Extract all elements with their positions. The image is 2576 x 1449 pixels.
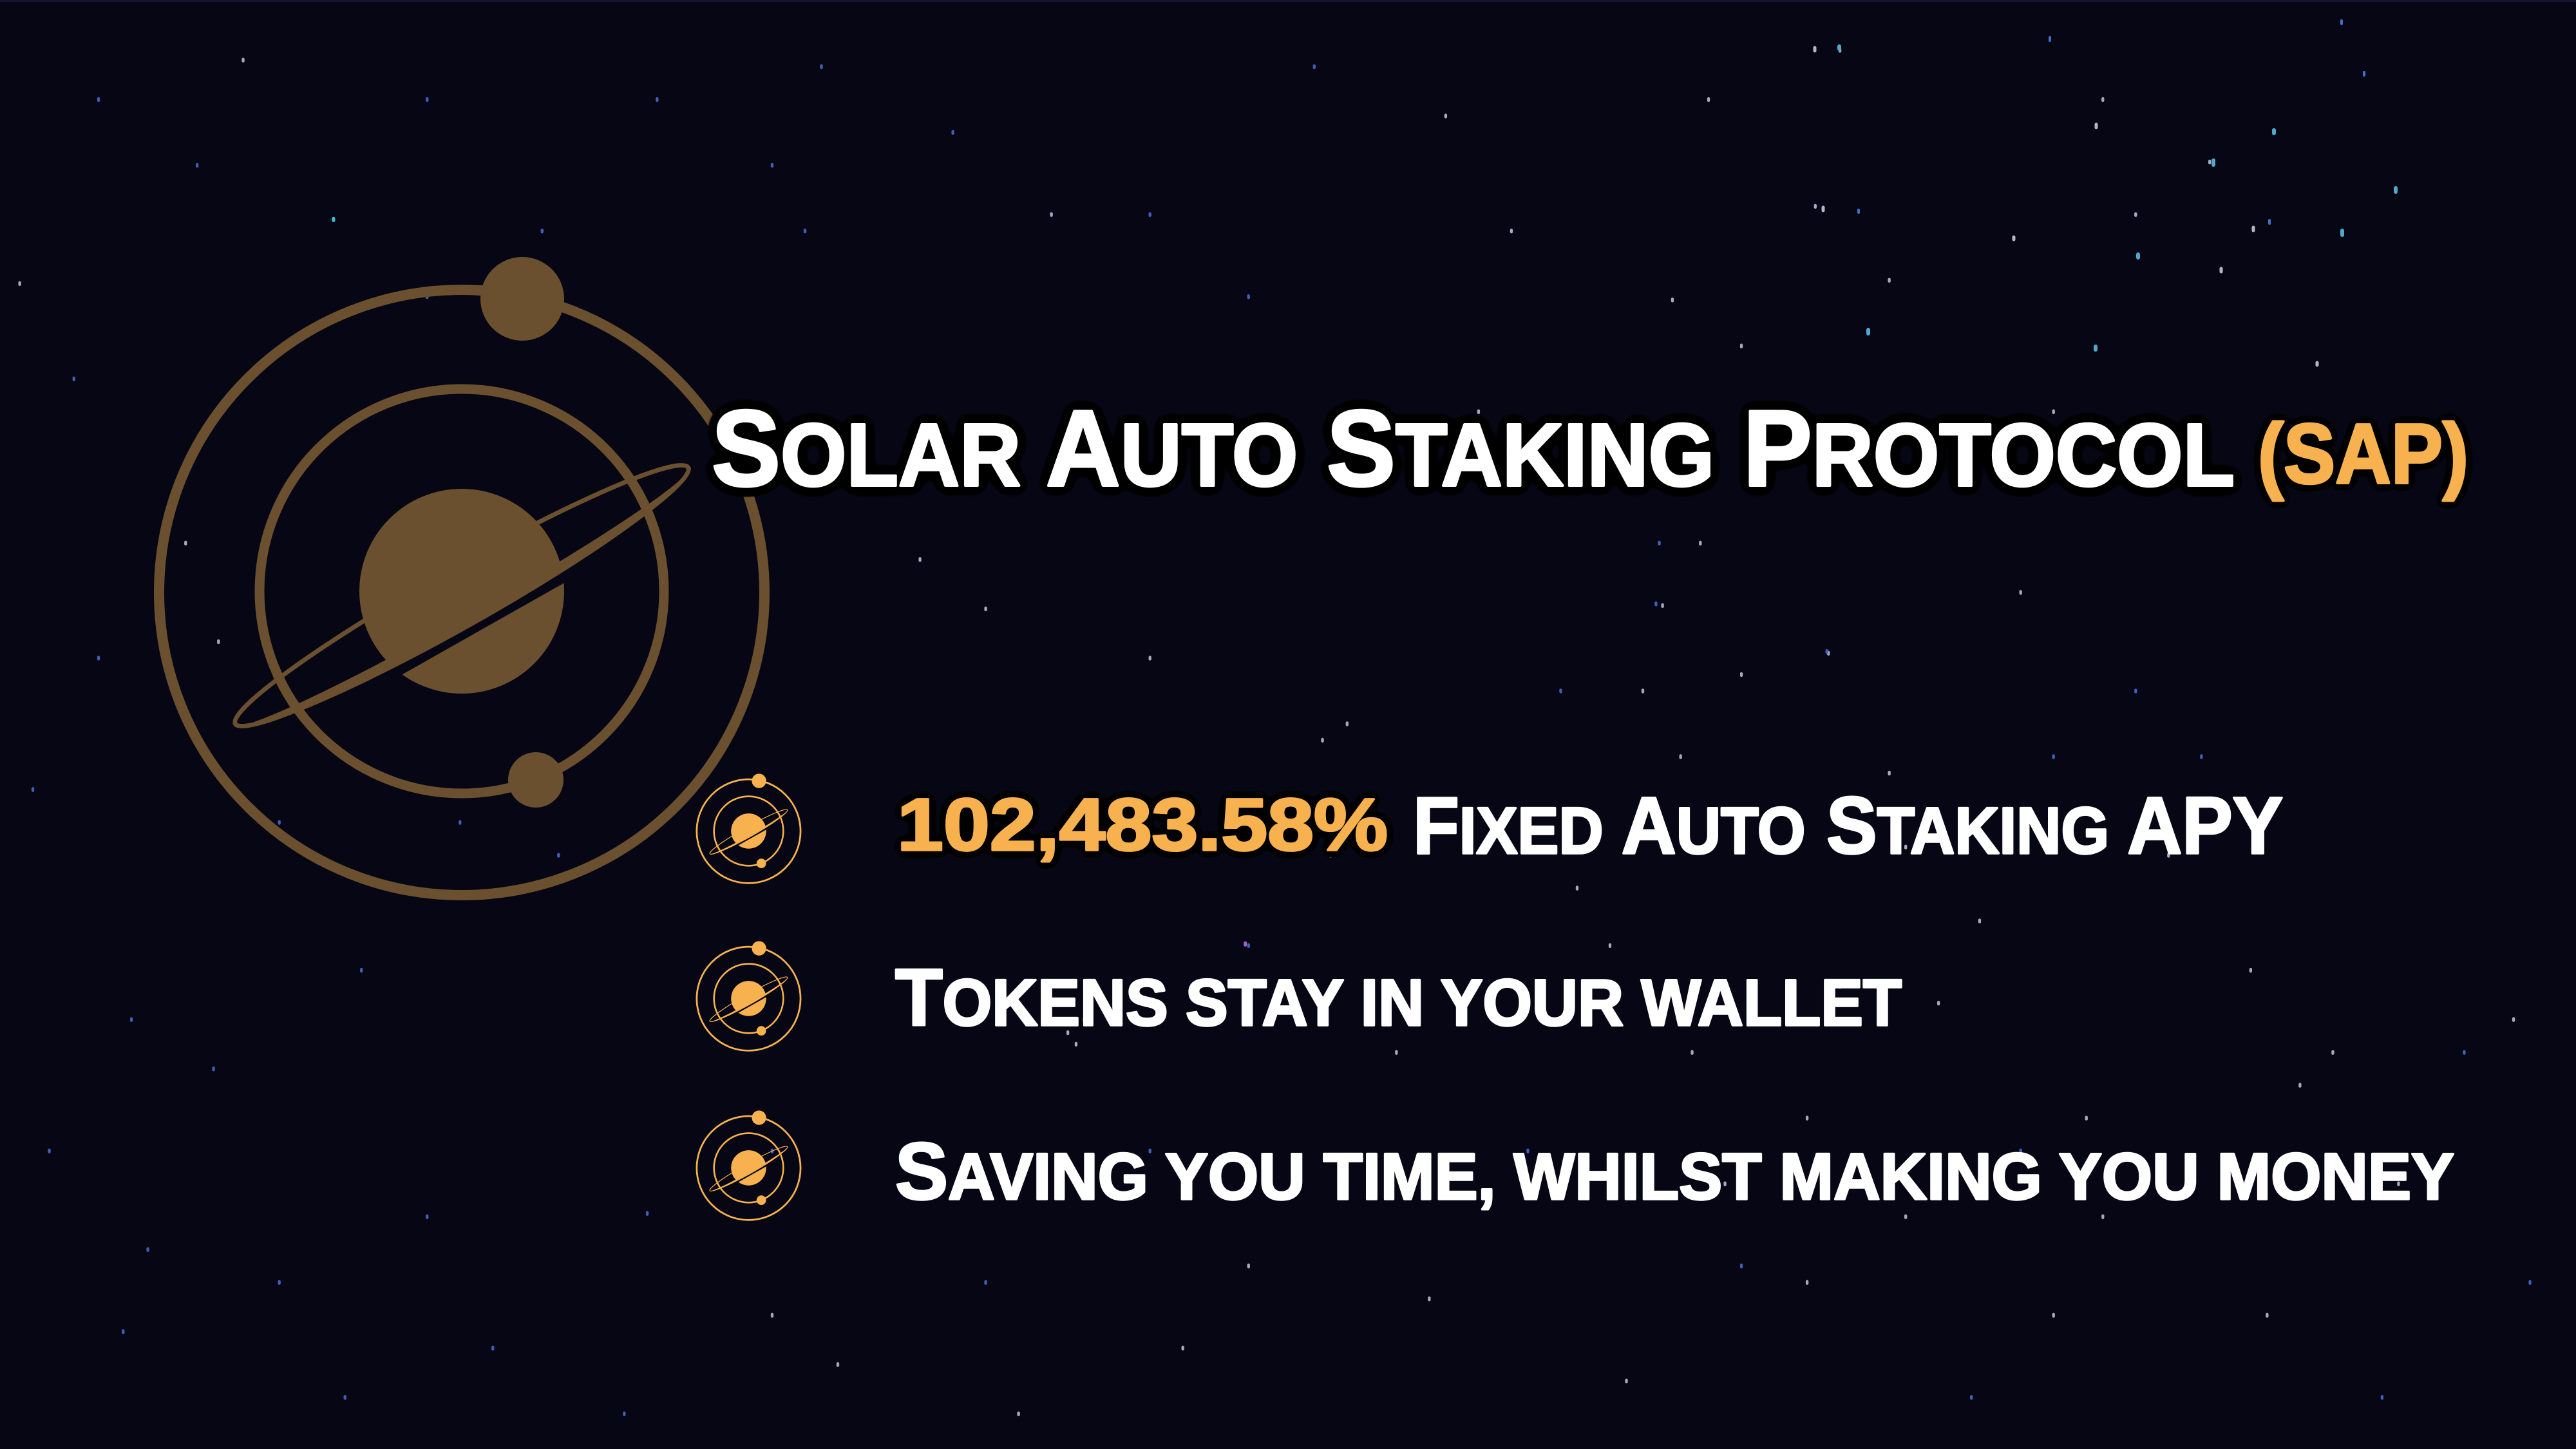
bullet 1 text: 102,483.58% bbox=[897, 784, 1388, 866]
bullet 1 text bbox=[897, 781, 2283, 871]
bullet 3 text: SAVING YOU TIME, WHILST MAKING YOU MONEY bbox=[895, 1127, 2454, 1217]
title: SOLAR AUTO STAKING PROTOCOL bbox=[712, 388, 2235, 509]
top edge line bbox=[0, 0, 2576, 2]
bullet 1 icon bbox=[697, 773, 800, 883]
bullet 2 icon bbox=[697, 941, 800, 1050]
logo: large planet emblem bbox=[159, 257, 764, 895]
bullet 1 text: FIXED AUTO STAKING APY bbox=[1413, 781, 2283, 871]
title accent: SAP: (SAP) bbox=[2258, 406, 2468, 501]
bullet 2 text: TOKENS STAY IN YOUR WALLET bbox=[895, 953, 1902, 1043]
bullet 3 icon bbox=[697, 1110, 800, 1220]
